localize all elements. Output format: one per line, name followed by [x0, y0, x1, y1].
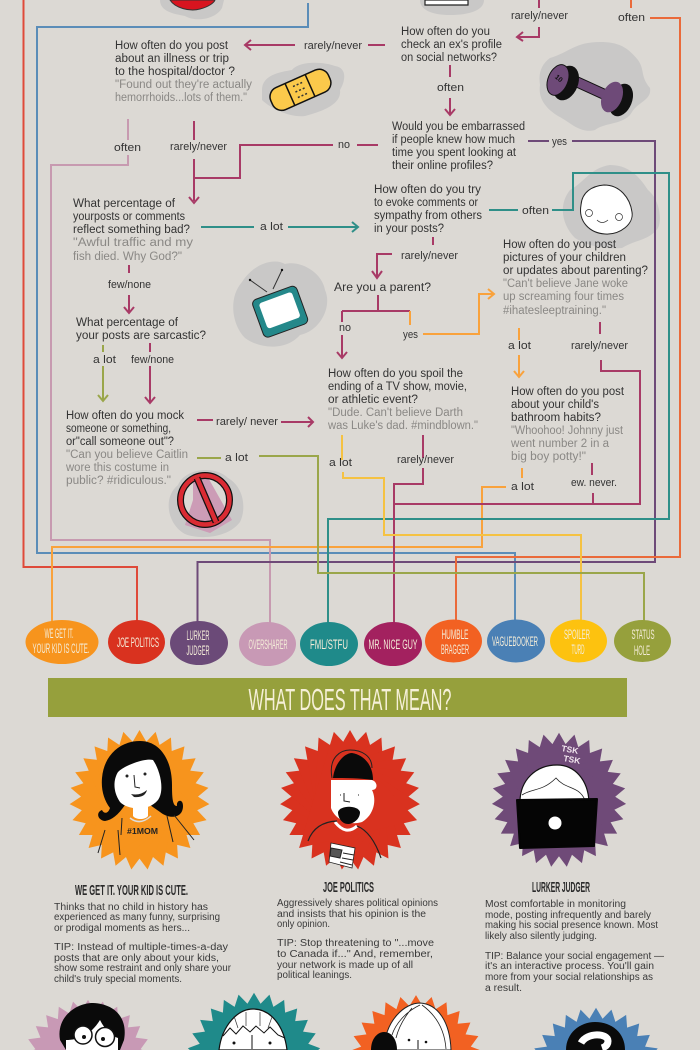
question: are you a parent: Are you a parent? [334, 282, 431, 294]
personality bubbles [26, 620, 671, 666]
question: bathroom: bathroom habits? [511, 412, 601, 424]
line: We get it [52, 487, 506, 622]
arrow: yes to parenting [410, 289, 494, 334]
connector lines to personality types [24, 0, 680, 624]
question: bathroom: big boy potty!" [511, 451, 586, 463]
portrait: person behind laptop: TSK [561, 743, 580, 756]
question: mock: or"call someone out"? [66, 436, 174, 448]
icon: band-aid [262, 63, 344, 116]
bubble: Vaguebooker [487, 620, 545, 662]
arrow: to parent question [372, 237, 433, 278]
description: TIP: Stop threatening to "...move [277, 938, 434, 949]
bubble: Mr. Nice Guy [364, 622, 422, 666]
description: TIP: Balance your social engagement — [485, 951, 664, 962]
line: Joe Politics [24, 0, 137, 622]
bubble: Spoiler Turd: SPOILER [564, 627, 590, 642]
heading: WE GET IT. YOUR KID IS CUTE. [75, 882, 188, 899]
question: spoil: ending of a TV show, movie, [328, 381, 467, 393]
arrow: to percentage question [189, 121, 378, 203]
description: posts that are only about your kids, [54, 953, 219, 964]
flow arrows [98, 0, 539, 478]
question: spoil: How often do you spoil the [328, 368, 463, 380]
question: spoil: "Dude. Can't believe Darth [328, 407, 463, 419]
description: or prodigal moments as hers... [54, 923, 190, 934]
bubble: Status Hole: HOLE [634, 643, 650, 658]
answer labels: yes [403, 329, 418, 341]
answer labels: often [522, 205, 549, 217]
description: political leanings. [277, 970, 352, 981]
question: ex profile [401, 26, 502, 64]
question: something bad [73, 198, 193, 263]
description: Most comfortable in monitoring [485, 899, 626, 910]
icon: top paper in cloud [420, 0, 484, 15]
icon: top red shape in cloud [160, 0, 224, 19]
bubble: Spoiler Turd: TURD [572, 642, 585, 657]
answer labels: rarely/never [511, 10, 568, 22]
answer labels: often [437, 82, 464, 94]
panel: lurker judger: LURKER JUDGER [532, 879, 590, 896]
question: something bad: reflect something bad? [73, 224, 190, 236]
portrait: person behind laptop [492, 711, 648, 875]
arrow: parent no and yes [337, 295, 410, 358]
description: your network is made up of all [277, 960, 413, 971]
question: sympathy [374, 184, 482, 235]
answer labels [93, 10, 645, 493]
description: Thinks that no child in history has [54, 902, 208, 913]
arrow: few/none to sarcastic [124, 265, 134, 313]
line: Spoiler turd [342, 435, 581, 624]
description: only opinion. [277, 919, 330, 930]
description: show some restraint and only share your [54, 963, 232, 974]
question: mock: someone or something, [66, 423, 171, 435]
question: illness: to the hospital/doctor ? [115, 66, 235, 78]
answer labels: few/none [108, 279, 151, 291]
question: mock: How often do you mock [66, 410, 184, 422]
question: something bad: yourposts or comments [73, 211, 185, 223]
question: embarrassed: their online profiles? [392, 160, 493, 172]
question: sympathy: in your posts? [374, 223, 444, 235]
description: making his social presence known. Most [485, 920, 658, 931]
bubble: Mr. Nice Guy: MR. NICE GUY [368, 637, 418, 652]
question: embarrassed: if people knew how much [392, 134, 515, 146]
arrow: a lot to sympathy [201, 222, 358, 232]
description: experienced as many funny, surprising [54, 912, 220, 923]
question: mock: "Can you believe Caitlin [66, 449, 188, 461]
arrow: to illness question [245, 40, 385, 50]
banner: what does that mean: WHAT DOES THAT MEAN? [248, 682, 452, 717]
description [54, 902, 232, 985]
icon: barbell [539, 42, 650, 131]
bubble: Status Hole: STATUS [632, 627, 654, 642]
question: spoil: or athletic event? [328, 394, 418, 406]
answer labels: a lot [511, 481, 534, 493]
description: child's truly special moments. [54, 974, 182, 985]
question: something bad: What percentage of [73, 198, 176, 210]
question: illness: How often do you post [115, 40, 229, 52]
portrait: vaguebooker question mark [534, 1008, 658, 1050]
question: illness: "Found out they're actually [115, 79, 252, 91]
bubble: Status Hole [614, 620, 671, 662]
line: Oversharer [51, 119, 270, 624]
question: parenting: or updates about parenting? [503, 265, 648, 277]
question: parenting: #ihatesleeptraining." [503, 305, 606, 317]
bubble: Lurker Judger [170, 621, 228, 665]
description: a result. [485, 983, 522, 994]
answer labels: a lot [508, 340, 531, 352]
question: sympathy: How often do you try [374, 184, 481, 196]
answer labels: a lot [260, 221, 283, 233]
description: to Canada if..." And, remember, [277, 949, 433, 960]
question: sarcastic: your posts are sarcastic? [76, 330, 206, 342]
question: embarrassed: time you spent looking at [392, 147, 517, 159]
panel: lurker judger [485, 711, 664, 994]
bubble: Oversharer: OVERSHARER [248, 637, 288, 652]
question: bathroom: "Whoohoo! Johnny just [511, 425, 624, 437]
icon: barbell: 10 [553, 74, 564, 84]
portrait: FML/STFU [188, 993, 320, 1050]
icon: baby face [581, 185, 632, 234]
description [485, 899, 664, 994]
answer labels: a lot [329, 457, 352, 469]
answer labels: a lot [93, 354, 116, 366]
portrait: bearded man [280, 707, 442, 878]
description: and insists that his opinion is the [277, 909, 426, 920]
answer labels: rarely/never [571, 340, 628, 352]
panel: joe politics: JOE POLITICS [323, 879, 374, 896]
question: ex profile: check an ex's profile [401, 39, 502, 51]
icon: baby cloud [563, 165, 660, 248]
question: mock: wore this costume in [65, 462, 169, 474]
answer labels: often [114, 142, 141, 154]
answer labels: no [339, 322, 351, 334]
question: something bad: "Awful traffic and my [73, 237, 193, 249]
answer labels: yes [552, 136, 567, 148]
panel: joe politics [277, 707, 442, 981]
question: bathroom [510, 386, 625, 463]
arrow: to ex profile question [517, 0, 539, 41]
line: Mr. Nice Guy [394, 322, 640, 624]
bubble: Vaguebooker: VAGUEBOOKER [492, 634, 538, 649]
line: Vaguebooker [37, 3, 515, 622]
panel: we get it [54, 707, 232, 985]
question: sarcastic: What percentage of [76, 317, 179, 329]
answer labels: a lot [225, 452, 248, 464]
question: parenting: How often do you post [503, 239, 617, 251]
arrow: rarely never to spoil [197, 417, 313, 427]
line: FML/STFU [328, 173, 669, 624]
portrait: mom: #1MOM [127, 827, 158, 836]
bubble: Lurker Judger: LURKER [186, 628, 210, 643]
description: TIP: Instead of multiple-times-a-day [54, 942, 228, 953]
answer labels: rarely/never [401, 250, 458, 262]
bubble: we get it: WE GET IT. [44, 626, 74, 641]
question: sympathy: to evoke comments or [374, 197, 478, 209]
bubble: Joe Politics: JOE POLITICS [117, 635, 159, 650]
line: Lurker judger [198, 141, 655, 624]
description: Aggressively shares political opinions [277, 898, 438, 909]
description: likely also silently judging. [485, 931, 597, 942]
question: something bad: fish died. Why God?" [73, 251, 182, 263]
question: sympathy: sympathy from others [374, 210, 482, 222]
bubble: FML/STFU [300, 622, 358, 666]
question: illness: about an illness or trip [115, 53, 229, 65]
arrow: few/none to mock [145, 343, 155, 403]
banner: what does that mean [48, 678, 627, 717]
arrow: a lot to bathroom [514, 328, 524, 478]
question: mock [65, 410, 188, 487]
question: mock: public? #ridiculous." [66, 475, 171, 487]
answer labels: rarely/never [304, 40, 362, 52]
bubble: FML/STFU: FML/STFU [310, 637, 348, 652]
question: bathroom: about your child's [511, 399, 599, 411]
description [277, 898, 438, 981]
bubble: Oversharer [239, 622, 296, 666]
question: embarrassed: Would you be embarrassed [392, 121, 525, 133]
question: spoil [327, 368, 478, 432]
answer labels: rarely/never [397, 454, 454, 466]
answer labels: ew. never. [571, 477, 617, 489]
arrow: a lot to mock (green) [98, 345, 108, 401]
description: more from your social relationships as [485, 972, 653, 983]
arrow: to embarrassed question [445, 65, 455, 115]
question: ex profile: on social networks? [401, 52, 497, 64]
question: illness [115, 40, 252, 104]
icon: television [233, 261, 327, 347]
answer labels: few/none [131, 354, 174, 366]
bubble: Lurker Judger: JUDGER [186, 643, 210, 658]
bubble: Humble Bragger: HUMBLE [442, 627, 468, 642]
bubble: Spoiler Turd [550, 620, 607, 662]
question: parenting: up screaming four times [503, 291, 624, 303]
bubble: we get it: YOUR KID IS CUTE. [32, 641, 90, 656]
portrait: oversharer with glasses [28, 1000, 148, 1050]
bubble: Humble Bragger: BRAGGER [441, 642, 469, 657]
description: mode, posting infrequently and barely [485, 910, 651, 921]
portrait: mom [70, 707, 232, 878]
question: spoil: was Luke's dad. #mindblown." [327, 420, 478, 432]
question: parenting: pictures of your children [503, 252, 626, 264]
line: Humble bragger [456, 0, 680, 622]
question: ex profile: How often do you [401, 26, 490, 38]
answer labels: rarely/never [170, 141, 227, 153]
question: bathroom: went number 2 in a [510, 438, 610, 450]
question: parenting: "Can't believe Jane woke [503, 278, 628, 290]
line: Status hole [197, 456, 644, 622]
portrait: person behind laptop: TSK [563, 753, 582, 766]
question: sarcastic [76, 317, 206, 342]
answer labels: often [618, 12, 645, 24]
question: bathroom: How often do you post [511, 386, 625, 398]
bubble: Joe Politics [108, 620, 165, 664]
bubble: Humble Bragger [425, 620, 482, 662]
question: illness: hemorrhoids...lots of them." [115, 92, 247, 104]
portrait: humble bragger [351, 995, 481, 1050]
question: parenting [503, 239, 648, 317]
answer labels: no [338, 139, 350, 151]
description: it's an interactive process. You'll gain [485, 961, 654, 972]
bubble: we get it [26, 620, 98, 664]
icon: no costume sign [169, 470, 243, 537]
question: embarrassed [392, 121, 525, 172]
answer labels: rarely/ never [216, 416, 278, 428]
